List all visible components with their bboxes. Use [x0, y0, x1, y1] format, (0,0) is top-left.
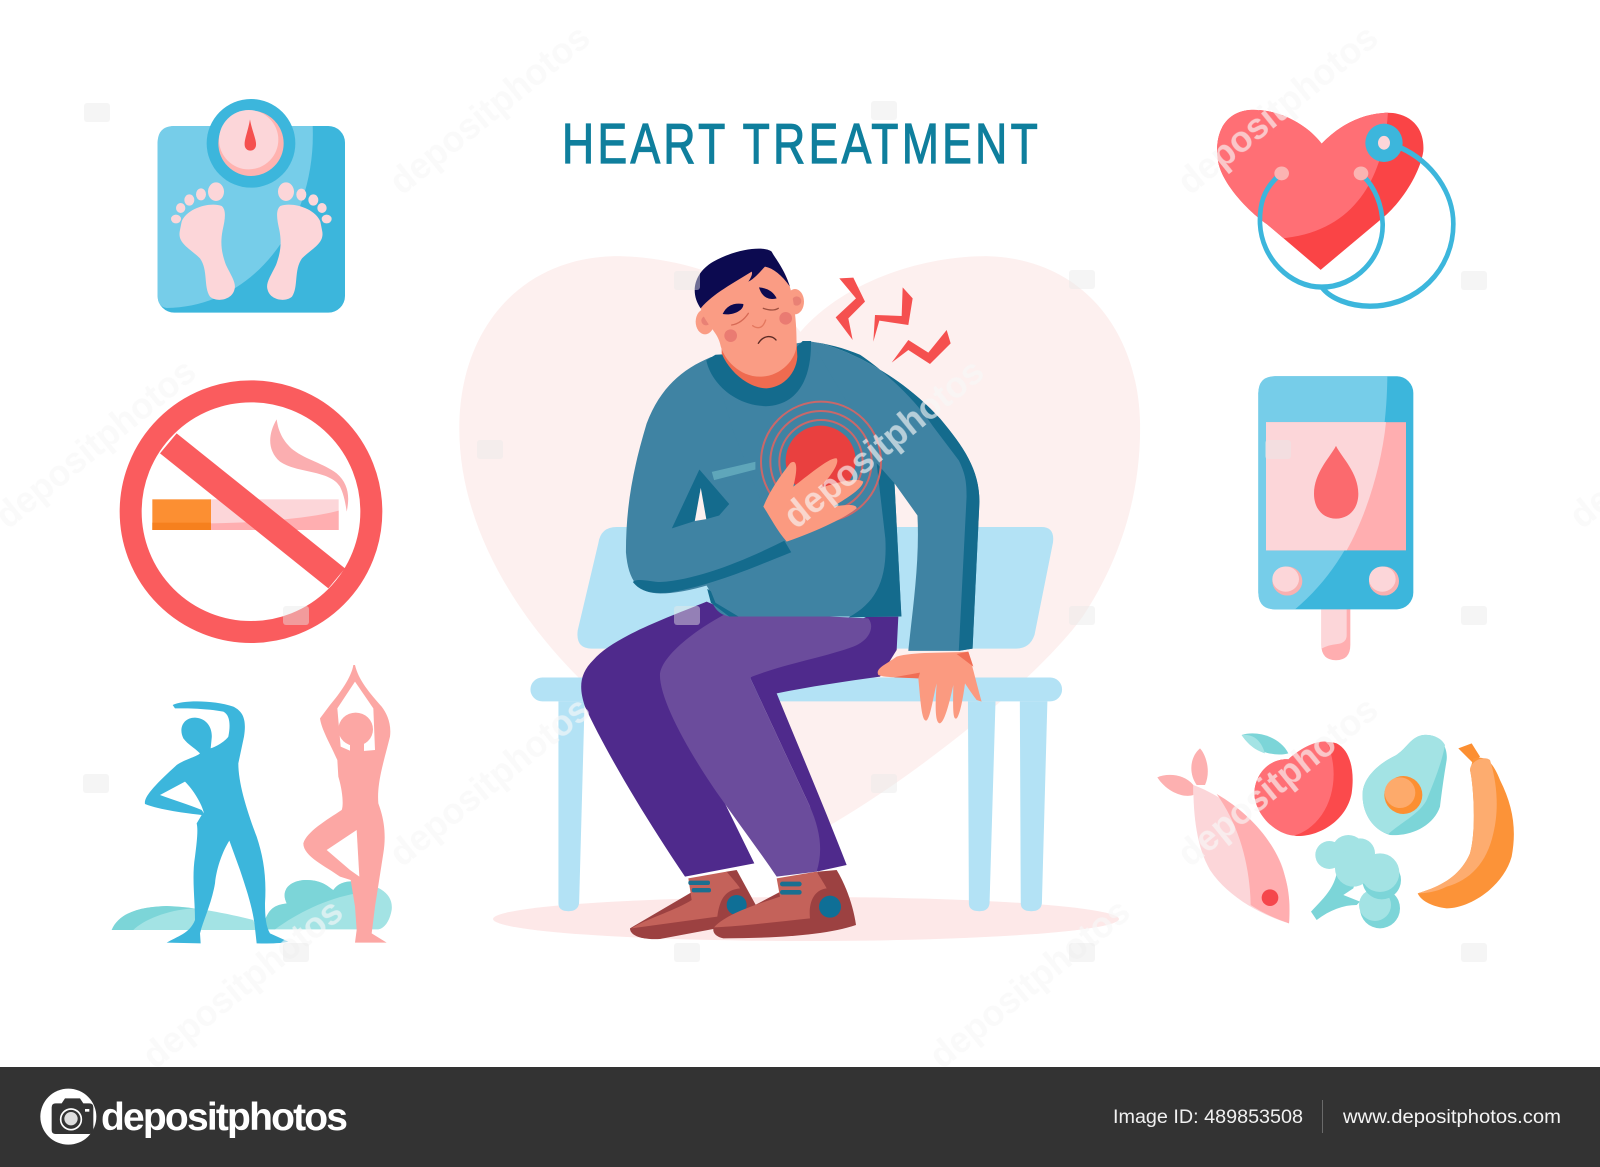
avocado	[1363, 735, 1447, 835]
pain bolts	[836, 278, 951, 364]
watermark text: depositphotos	[1169, 16, 1385, 202]
pale heart background	[459, 256, 1140, 841]
fish	[1157, 748, 1290, 923]
broccoli	[1311, 835, 1401, 928]
logo wordmark: depositphotos	[101, 1096, 348, 1139]
bench	[530, 527, 1062, 911]
watermark text: depositphotos	[775, 350, 991, 536]
legs and shoes	[581, 602, 982, 939]
watermark text: depositphotos	[921, 890, 1137, 1076]
sweater	[626, 341, 979, 651]
aching heart with hand	[761, 402, 881, 542]
footer bar	[0, 1067, 1600, 1167]
icon: heart with stethoscope	[1217, 110, 1456, 309]
ground shadow	[493, 897, 1119, 941]
icon: no smoking sign	[131, 391, 371, 632]
icon: camera logo	[40, 1089, 96, 1145]
title: HEART TREATMENT	[562, 112, 1038, 175]
icon: blood glucose meter	[1258, 376, 1413, 660]
panel: seated man with chest pain	[459, 249, 1140, 941]
icon: exercising figures	[112, 665, 392, 943]
banana	[1418, 743, 1514, 908]
hand on bench	[878, 652, 982, 723]
icon: weighing scale	[158, 99, 345, 313]
apple	[1242, 733, 1353, 836]
watermark camera marks	[83, 101, 1487, 962]
watermark text: depositphotos	[1169, 688, 1385, 874]
watermark text: depositphotos	[381, 688, 597, 874]
head	[695, 249, 804, 388]
watermark text: depositphotos	[381, 16, 597, 202]
watermark text: depositphotos	[134, 890, 350, 1076]
image id: Image ID: 489853508	[1113, 1107, 1303, 1128]
website url: www.depositphotos.com	[1342, 1107, 1561, 1128]
icon: healthy food	[1157, 733, 1514, 928]
